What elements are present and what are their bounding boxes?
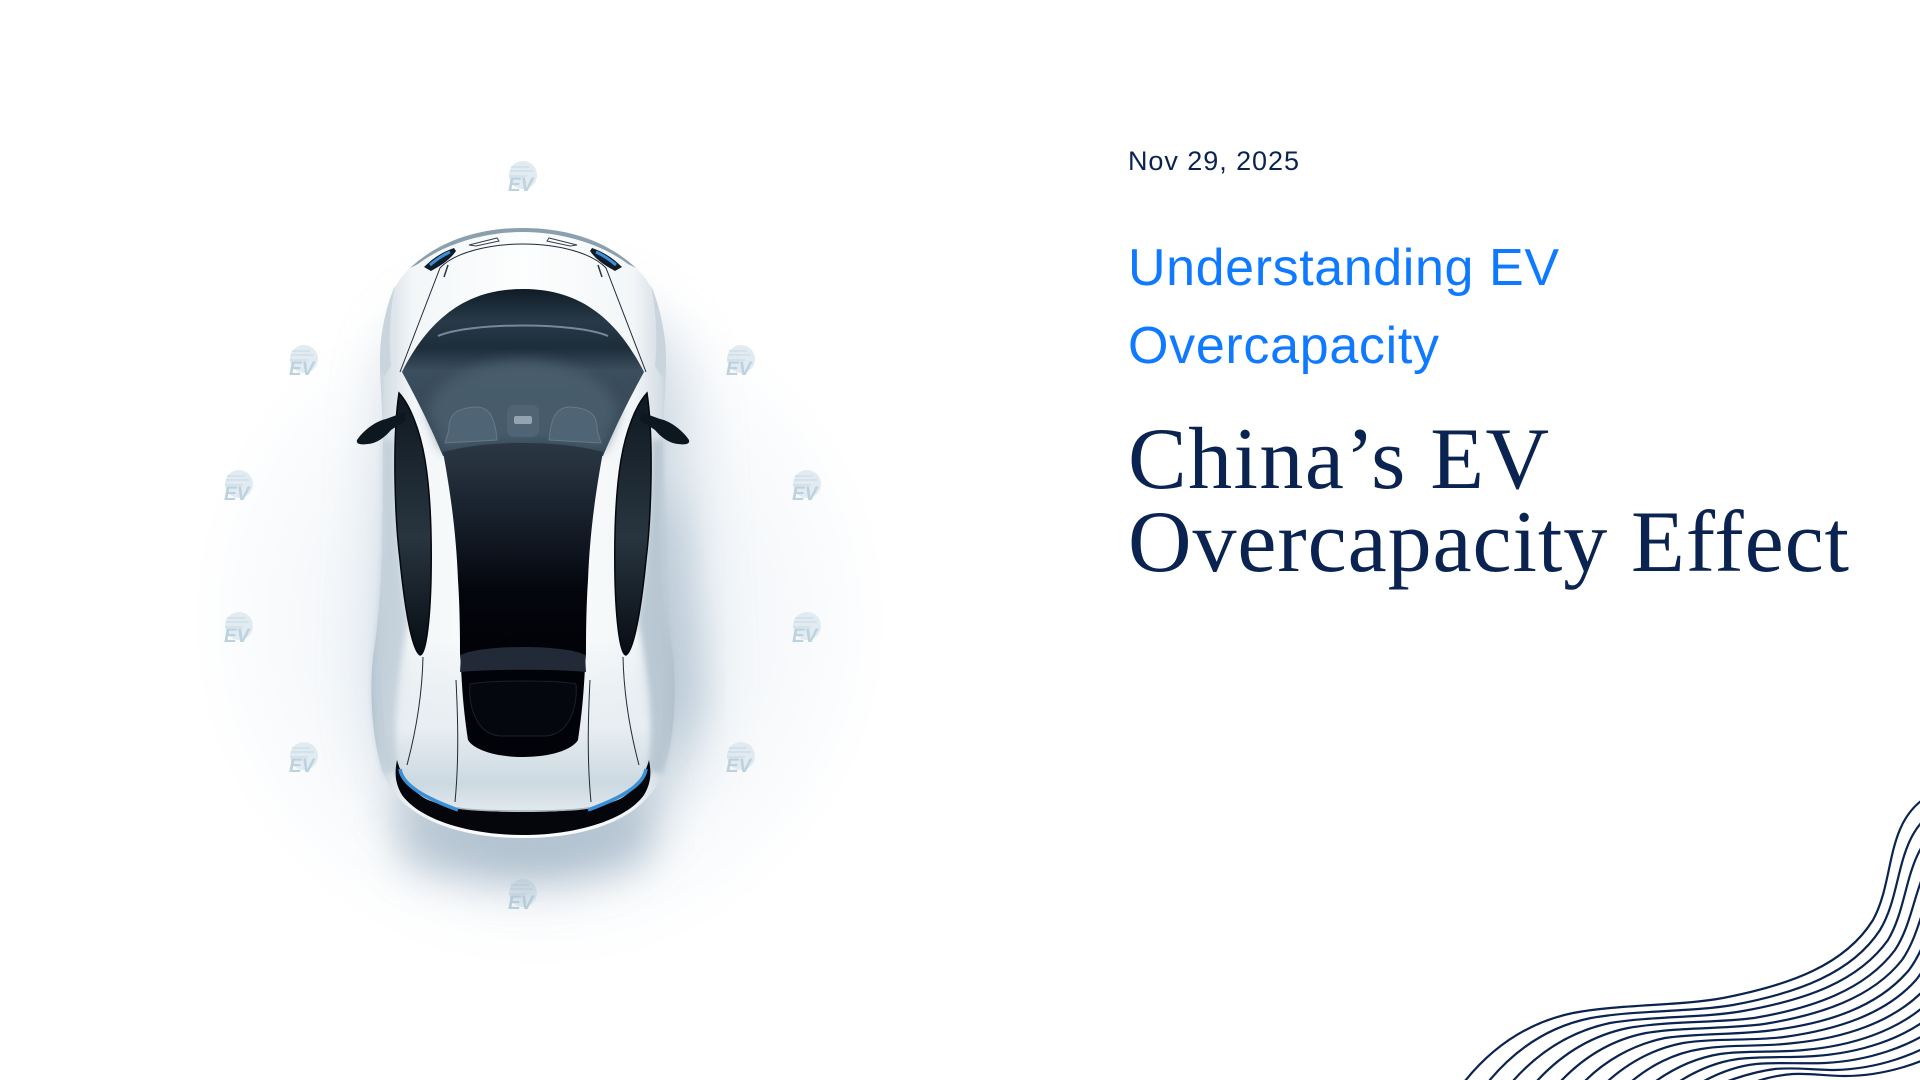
watermark upper right [726,345,755,380]
watermark top [508,161,537,196]
front fender panels [381,285,665,377]
watermark right upper: EV [792,484,819,505]
watermark left lower [224,612,253,647]
decorative wave lines [1465,798,1920,1080]
roof panel and rear window [443,443,603,757]
windshield glass [402,289,644,456]
watermark right upper [792,470,821,505]
car body [371,228,675,838]
car illustration with watermarks [190,161,890,970]
watermark lower left: EV [289,756,316,777]
car shadow [380,300,702,882]
watermark icons [224,161,821,914]
watermark right lower [792,612,821,647]
watermark upper left: EV [289,359,316,380]
watermark lower left [289,742,318,777]
rear light band [396,760,650,835]
main title: China’s EV [1128,411,1549,508]
interior seats and console [428,360,618,450]
rear deck shading [382,640,664,822]
rear wiper bar [438,326,608,336]
watermark left upper [224,470,253,505]
top edge strip [410,228,636,277]
watermark bottom [508,879,537,914]
side mirrors [357,412,689,444]
watermark upper right: EV [726,359,753,380]
watermark left upper: EV [224,484,251,505]
side windows [395,393,431,655]
watermark right lower: EV [792,626,819,647]
watermark left lower: EV [224,626,251,647]
subtitle [1128,239,1559,375]
door and panel lines [400,244,646,802]
watermark lower right [726,742,755,777]
watermark lower right: EV [726,756,753,777]
subtitle: Overcapacity [1128,317,1439,375]
rear glass hatch [460,647,586,736]
soft halo behind car [190,270,890,970]
watermark top: EV [508,175,535,196]
main title: Overcapacity Effect [1128,494,1849,591]
subtitle: Understanding EV [1128,239,1559,297]
watermark bottom: EV [508,893,535,914]
watermark upper left [289,345,318,380]
main title [1128,411,1849,591]
side sills shading [372,440,408,775]
date: Nov 29, 2025 [1128,146,1299,176]
